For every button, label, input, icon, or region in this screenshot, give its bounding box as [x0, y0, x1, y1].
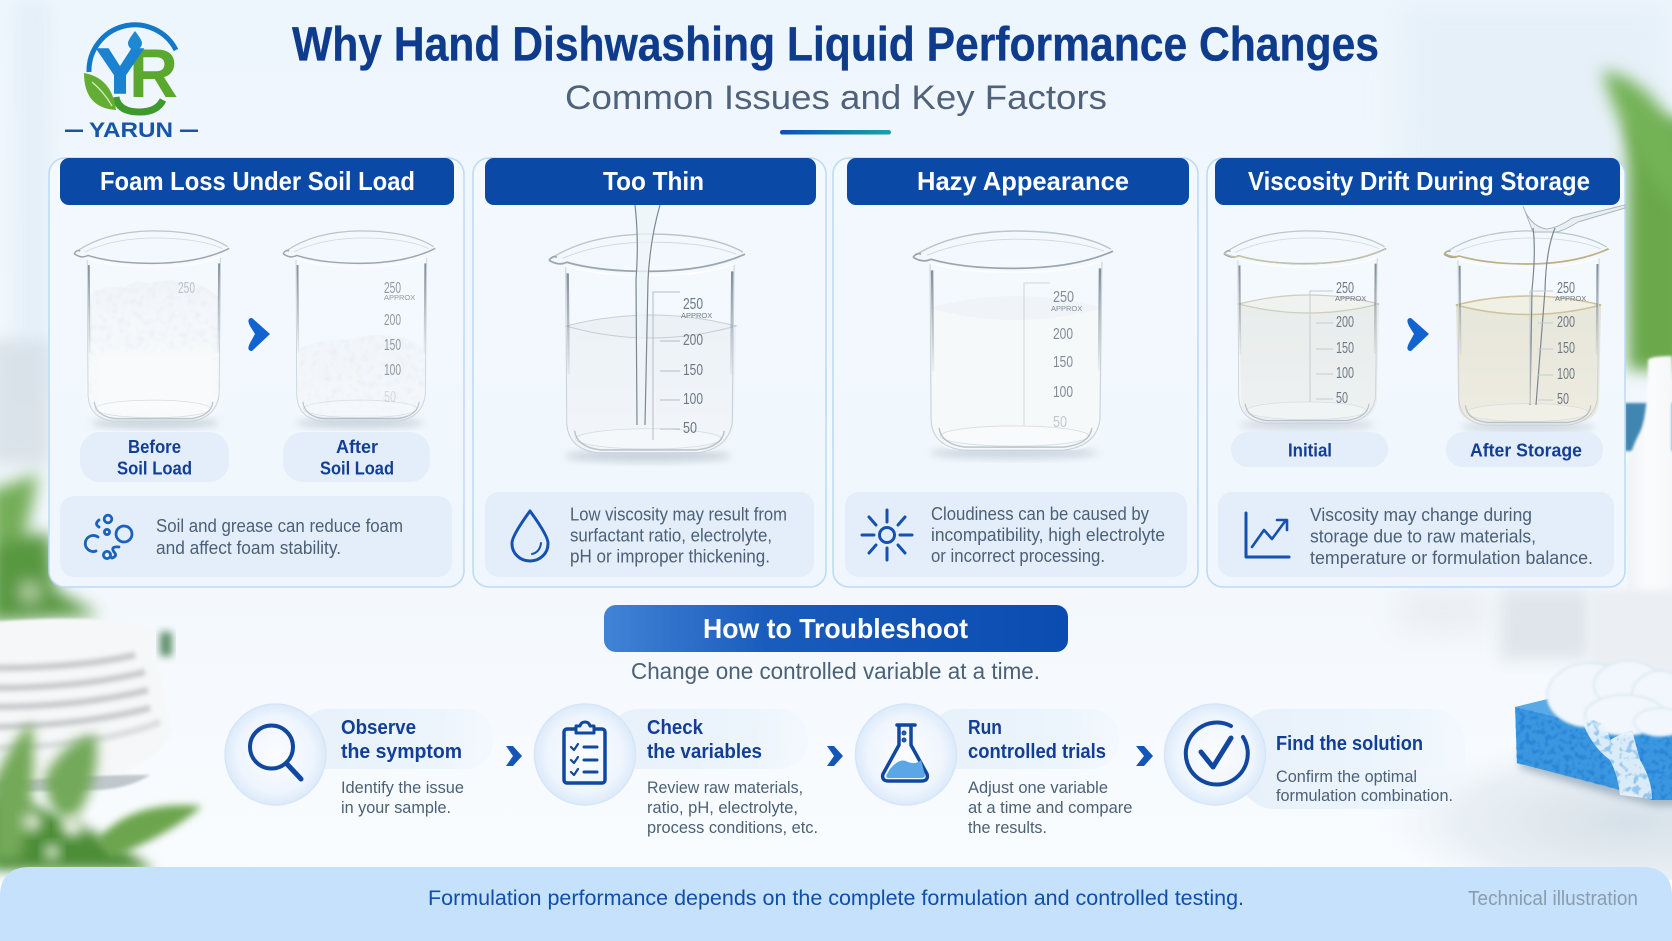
- logo: R: [129, 35, 178, 112]
- beaker: initial: 250: [1336, 280, 1354, 297]
- info box: too thin: [485, 492, 814, 577]
- left leaves lower: [0, 722, 202, 870]
- info box: viscosity drift: temperature or formulation balance.: [1310, 548, 1593, 568]
- label: after soil load: [283, 432, 430, 482]
- label: initial: [1231, 432, 1388, 467]
- panel: foam loss under soil load: [49, 158, 464, 587]
- beaker: too thin with pouring stream: 200: [683, 332, 703, 349]
- step 1: observe the symptom: the symptom: [341, 741, 462, 763]
- info box: foam loss: [60, 496, 452, 577]
- panel heading: viscosity drift: Viscosity Drift During Storage: [1248, 166, 1590, 196]
- panel heading: too thin: [485, 158, 816, 205]
- beaker: too thin with pouring stream: APPROX: [681, 311, 712, 320]
- troubleshoot heading banner: [604, 605, 1068, 652]
- step 1: observe the symptom: Observe: [341, 717, 416, 739]
- beaker: too thin with pouring stream: 150: [683, 362, 703, 379]
- counter: [1370, 743, 1672, 887]
- beaker: after storage with pour: 200: [1557, 314, 1575, 331]
- title: Why Hand Dishwashing Liquid Performance Changes: [292, 18, 1379, 72]
- info box: hazy: Cloudiness can be caused by: [931, 504, 1149, 524]
- left leaves upper: [0, 472, 100, 622]
- panel: hazy appearance: [833, 158, 1198, 587]
- right leaves: [1602, 70, 1672, 370]
- info box: viscosity drift: Viscosity may change during: [1310, 505, 1532, 525]
- beaker: after soil load: [283, 231, 435, 428]
- beaker: initial: 150: [1336, 340, 1354, 357]
- step 4: find the solution: [1164, 704, 1465, 809]
- beaker: initial: 100: [1336, 365, 1354, 382]
- step 1: observe the symptom: in your sample.: [341, 798, 451, 817]
- step 3: run controlled trials: Run: [968, 717, 1002, 739]
- beaker: after storage with pour: [1444, 205, 1625, 432]
- logo: YARUN: [89, 119, 173, 142]
- arrow: [248, 318, 270, 351]
- icon: magnifier: [250, 726, 301, 779]
- beaker: before soil load: 250: [178, 280, 195, 297]
- beaker: too thin with pouring stream: 250: [683, 296, 703, 313]
- step 2: check the variables: [534, 704, 818, 837]
- arrow: [1136, 746, 1153, 766]
- footer bar: Technical illustration: [1468, 888, 1638, 910]
- beaker: initial: 50: [1336, 390, 1348, 407]
- troubleshoot subheading: Change one controlled variable at a time.: [631, 658, 1040, 684]
- info box: hazy: incompatibility, high electrolyte: [931, 525, 1165, 545]
- beaker: after storage with pour: 50: [1557, 391, 1569, 408]
- info box: hazy: or incorrect processing.: [931, 546, 1105, 566]
- beaker: after soil load: APPROX: [384, 293, 415, 302]
- step 4: find the solution: formulation combination.: [1276, 786, 1453, 805]
- beaker: hazy liquid: 100: [1053, 384, 1073, 401]
- beaker: initial: APPROX: [1335, 294, 1366, 303]
- label: after soil load: Soil Load: [320, 458, 394, 478]
- panel heading: hazy appearance: [847, 158, 1189, 205]
- info box: viscosity drift: storage due to raw materials,: [1310, 526, 1536, 546]
- beaker: after storage with pour: 250: [1557, 280, 1575, 297]
- logo: [65, 25, 198, 142]
- beaker: hazy liquid: APPROX: [1051, 304, 1082, 313]
- info box: too thin: surfactant ratio, electrolyte,: [570, 526, 772, 546]
- beaker: too thin with pouring stream: [549, 205, 745, 462]
- icon: flask: [883, 725, 927, 781]
- step 2: check the variables: process conditions, etc.: [647, 818, 818, 837]
- distant bottles: [1400, 590, 1672, 678]
- plates: [0, 619, 172, 792]
- beaker: hazy liquid: 150: [1053, 354, 1073, 371]
- beaker: hazy liquid: 50: [1053, 414, 1067, 431]
- step 4: find the solution: Find the solution: [1276, 733, 1423, 755]
- info box: too thin: Low viscosity may result from: [570, 504, 787, 524]
- beaker: hazy liquid: 250: [1053, 289, 1074, 306]
- small leaf speck: [160, 632, 172, 656]
- beaker: after storage with pour: APPROX: [1555, 294, 1586, 303]
- backdrop behind bottle: [1625, 403, 1672, 451]
- icon: check circle: [1186, 723, 1248, 785]
- arrow: [506, 746, 522, 766]
- footer bar: [0, 867, 1672, 941]
- step 1: observe the symptom: Identify the issue: [341, 778, 464, 797]
- beaker: before soil load: [74, 231, 229, 428]
- label: initial: Initial: [1288, 440, 1332, 460]
- label: before soil load: Before: [128, 437, 181, 457]
- beaker: hazy liquid: 200: [1053, 326, 1073, 343]
- step 2: check the variables: Check: [647, 717, 704, 739]
- logo: Y: [96, 35, 144, 107]
- info box: too thin: pH or improper thickening.: [570, 546, 770, 566]
- step 3: run controlled trials: Adjust one variable: [968, 778, 1108, 797]
- label: before soil load: Soil Load: [117, 458, 192, 478]
- icon: bubbles: [85, 515, 132, 559]
- step 2: check the variables: ratio, pH, electrolyte,: [647, 798, 798, 817]
- troubleshoot heading banner: How to Troubleshoot: [703, 613, 968, 644]
- panel heading: foam loss: Foam Loss Under Soil Load: [100, 166, 415, 196]
- beaker: after soil load: 150: [384, 337, 401, 354]
- info box: foam loss: Soil and grease can reduce foam: [156, 516, 403, 536]
- beaker: after soil load: 200: [384, 312, 401, 329]
- panel heading: foam loss: [60, 158, 454, 205]
- step 4: find the solution: Confirm the optimal: [1276, 767, 1417, 786]
- icon: line chart: [1246, 513, 1289, 557]
- beaker: too thin with pouring stream: 50: [683, 420, 697, 437]
- beaker: after soil load: 50: [384, 389, 396, 406]
- label: before soil load: [80, 432, 229, 482]
- arrow: [827, 746, 843, 766]
- step 2: check the variables: Review raw materials,: [647, 778, 803, 797]
- step 2: check the variables: the variables: [647, 741, 762, 763]
- panel heading: viscosity drift: [1215, 158, 1620, 205]
- label: after soil load: After: [336, 437, 378, 457]
- step 3: run controlled trials: at a time and compare: [968, 798, 1132, 817]
- step 3: run controlled trials: the results.: [968, 818, 1047, 837]
- title underline: [780, 130, 891, 134]
- beaker: after storage with pour: 150: [1557, 340, 1575, 357]
- subtitle: Common Issues and Key Factors: [565, 79, 1107, 117]
- panel heading: hazy appearance: Hazy Appearance: [917, 166, 1129, 196]
- step 3: run controlled trials: [856, 704, 1132, 837]
- panel heading: too thin: Too Thin: [603, 166, 704, 196]
- beaker: initial: 200: [1336, 314, 1354, 331]
- step 3: run controlled trials: controlled trials: [968, 741, 1106, 763]
- footer bar: Formulation performance depends on the complete formulation and controlled testing.: [428, 887, 1244, 910]
- info box: viscosity drift: [1218, 492, 1614, 577]
- info box: hazy: [845, 492, 1187, 577]
- icon: sun haze: [862, 510, 912, 560]
- arrow: [1407, 318, 1429, 351]
- bottle: [1627, 356, 1672, 680]
- panel: viscosity drift during storage: [1207, 158, 1625, 587]
- beaker: initial: [1224, 231, 1386, 430]
- step 1: observe the symptom: [225, 704, 493, 817]
- beaker: too thin with pouring stream: 100: [683, 391, 703, 408]
- beaker: after storage with pour: 100: [1557, 366, 1575, 383]
- label: after storage: [1446, 432, 1603, 467]
- icon: water drop: [512, 511, 548, 561]
- beaker: hazy liquid: [913, 231, 1113, 459]
- icon: clipboard: [564, 722, 605, 783]
- beaker: after soil load: 100: [384, 362, 401, 379]
- sponge: [1515, 661, 1672, 806]
- label: after storage: After Storage: [1470, 440, 1582, 460]
- beaker: after soil load: 250: [384, 280, 401, 297]
- info box: foam loss: and affect foam stability.: [156, 538, 341, 558]
- panel: too thin: [473, 158, 826, 587]
